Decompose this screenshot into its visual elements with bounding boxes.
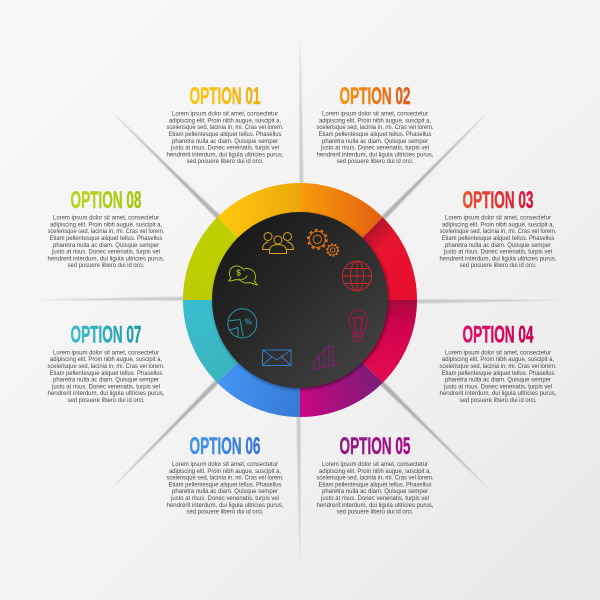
body text: sed posuere libero dui id orci. <box>68 262 145 269</box>
centre disc <box>212 212 389 390</box>
body text: adipiscing elit. Proin nibh augue, suscipit a, <box>169 468 281 475</box>
body text: pharetra nulla ac diam. Quisque semper <box>322 488 429 495</box>
option 06 <box>166 433 284 516</box>
body text: adipiscing elit. Proin nibh augue, suscipit a, <box>50 221 162 228</box>
body text: justo at risus. Donec venenatis, turpis vel <box>170 495 279 502</box>
body text <box>48 215 165 269</box>
body text: Lorem ipsum dolor sit amet, consectetur <box>53 215 160 222</box>
body text: pharetra nulla ac diam. Quisque semper <box>53 242 160 249</box>
body text <box>166 461 284 516</box>
body text: Etiam pellentesque aliquet tellus. Phasellus <box>168 481 282 488</box>
heading: OPTION 04 <box>462 322 534 348</box>
body text: scelerisque sed, lacinia in, mi. Cras vel lorem. <box>440 363 557 370</box>
body text: scelerisque sed, lacinia in, mi. Cras vel lorem. <box>440 228 557 235</box>
body text: adipiscing elit. Proin nibh augue, suscipit a, <box>442 221 554 228</box>
option 01 <box>166 83 284 165</box>
icon: envelope <box>262 350 291 366</box>
heading: OPTION 02 <box>340 83 410 110</box>
body text: justo at risus. Donec venenatis, turpis vel <box>443 249 552 256</box>
body text: Lorem ipsum dolor sit amet, consectetur <box>445 349 552 356</box>
body text: justo at risus. Donec venenatis, turpis vel <box>443 383 552 390</box>
body text: justo at risus. Donec venenatis, turpis vel <box>51 249 160 256</box>
heading: OPTION 03 <box>462 187 534 214</box>
body text: pharetra nulla ac diam. Quisque semper <box>322 138 429 145</box>
heading: OPTION 06 <box>190 433 260 460</box>
body text: sed posuere libero dui id orci. <box>460 397 537 404</box>
body text: sed posuere libero dui id orci. <box>186 509 264 516</box>
body text: Lorem ipsum dolor sit amet, consectetur <box>322 111 429 118</box>
option 03 <box>440 187 557 269</box>
body text <box>440 349 557 404</box>
icon: percentage pie <box>228 309 257 338</box>
body text: adipiscing elit. Proin nibh augue, suscipit a, <box>319 117 431 124</box>
body text: pharetra nulla ac diam. Quisque semper <box>53 377 160 384</box>
body text: adipiscing elit. Proin nibh augue, suscipit a, <box>442 356 554 363</box>
body text: Lorem ipsum dolor sit amet, consectetur <box>445 215 552 222</box>
body text: justo at risus. Donec venenatis, turpis vel <box>320 495 429 502</box>
option 08 <box>48 187 165 269</box>
body text: scelerisque sed, lacinia in, mi. Cras vel lorem. <box>316 124 434 131</box>
body text: hendrerit interdum, dui ligula ultricies purus, <box>316 151 434 158</box>
body text: justo at risus. Donec venenatis, turpis vel <box>170 145 279 152</box>
body text: pharetra nulla ac diam. Quisque semper <box>172 138 279 145</box>
body text: hendrerit interdum, dui ligula ultricies purus, <box>440 390 557 397</box>
body text: justo at risus. Donec venenatis, turpis vel <box>320 145 429 152</box>
heading: OPTION 05 <box>340 433 410 460</box>
body text: justo at risus. Donec venenatis, turpis vel <box>51 383 160 390</box>
body text: adipiscing elit. Proin nibh augue, suscipit a, <box>169 117 281 124</box>
body text: scelerisque sed, lacinia in, mi. Cras vel lorem. <box>316 475 434 482</box>
icon: globe <box>342 261 372 291</box>
ring segment 08 <box>183 217 300 300</box>
body text <box>316 461 434 516</box>
body text: Etiam pellentesque aliquet tellus. Phasellus <box>442 370 555 377</box>
option 07 <box>48 322 165 404</box>
body text: scelerisque sed, lacinia in, mi. Cras vel lorem. <box>48 363 165 370</box>
body text: sed posuere libero dui id orci. <box>68 397 145 404</box>
body text: Lorem ipsum dolor sit amet, consectetur <box>53 349 160 356</box>
heading: OPTION 01 <box>190 83 260 110</box>
body text: hendrerit interdum, dui ligula ultricies purus, <box>48 255 165 262</box>
body text: Etiam pellentesque aliquet tellus. Phasellus <box>50 370 163 377</box>
body text: Etiam pellentesque aliquet tellus. Phasellus <box>318 131 432 138</box>
ring segment 01 <box>217 183 300 300</box>
body text: pharetra nulla ac diam. Quisque semper <box>445 242 552 249</box>
ring segment 05 <box>300 300 383 417</box>
body text: hendrerit interdum, dui ligula ultricies purus, <box>166 151 284 158</box>
body text: hendrerit interdum, dui ligula ultricies purus, <box>440 255 557 262</box>
body text: Etiam pellentesque aliquet tellus. Phasellus <box>318 481 432 488</box>
body text: sed posuere libero dui id orci. <box>186 158 264 165</box>
colour ring <box>183 183 417 417</box>
option 04 <box>440 322 557 404</box>
icon: light bulb <box>349 310 368 342</box>
body text: pharetra nulla ac diam. Quisque semper <box>445 377 552 384</box>
icon: gears <box>308 230 339 256</box>
body text <box>166 111 284 165</box>
body text <box>48 349 165 404</box>
ring segment 02 <box>300 183 383 300</box>
body text: hendrerit interdum, dui ligula ultricies purus, <box>316 502 434 509</box>
body text: pharetra nulla ac diam. Quisque semper <box>172 488 279 495</box>
icon: people <box>262 232 294 254</box>
body text: Lorem ipsum dolor sit amet, consectetur <box>172 111 279 118</box>
icon: bar chart <box>312 346 339 370</box>
body text: adipiscing elit. Proin nibh augue, suscipit a, <box>50 356 162 363</box>
body text: Etiam pellentesque aliquet tellus. Phasellus <box>168 131 282 138</box>
dollar sign: $ <box>236 268 241 278</box>
body text: scelerisque sed, lacinia in, mi. Cras vel lorem. <box>166 124 284 131</box>
body text: sed posuere libero dui id orci. <box>336 509 414 516</box>
body text: sed posuere libero dui id orci. <box>460 262 537 269</box>
body text <box>440 215 557 269</box>
body text: Etiam pellentesque aliquet tellus. Phasellus <box>442 235 555 242</box>
body text: scelerisque sed, lacinia in, mi. Cras vel lorem. <box>48 228 165 235</box>
ring segment 03 <box>300 217 417 300</box>
body text: Lorem ipsum dolor sit amet, consectetur <box>172 461 279 468</box>
body text: sed posuere libero dui id orci. <box>336 158 414 165</box>
body text: hendrerit interdum, dui ligula ultricies purus, <box>48 390 165 397</box>
option 05 <box>316 433 434 516</box>
body text <box>316 111 434 165</box>
ring segment 04 <box>300 300 417 383</box>
icon: speech bubbles <box>228 266 258 285</box>
ring segment 07 <box>183 300 300 383</box>
heading: OPTION 08 <box>70 187 142 214</box>
ring segment 06 <box>217 300 300 417</box>
body text: adipiscing elit. Proin nibh augue, suscipit a, <box>319 468 431 475</box>
body text: Lorem ipsum dolor sit amet, consectetur <box>322 461 429 468</box>
option 02 <box>316 83 434 165</box>
heading: OPTION 07 <box>70 322 142 348</box>
body text: hendrerit interdum, dui ligula ultricies purus, <box>166 502 284 509</box>
body text: scelerisque sed, lacinia in, mi. Cras vel lorem. <box>166 475 284 482</box>
percent sign: % <box>245 318 252 326</box>
body text: Etiam pellentesque aliquet tellus. Phasellus <box>50 235 163 242</box>
